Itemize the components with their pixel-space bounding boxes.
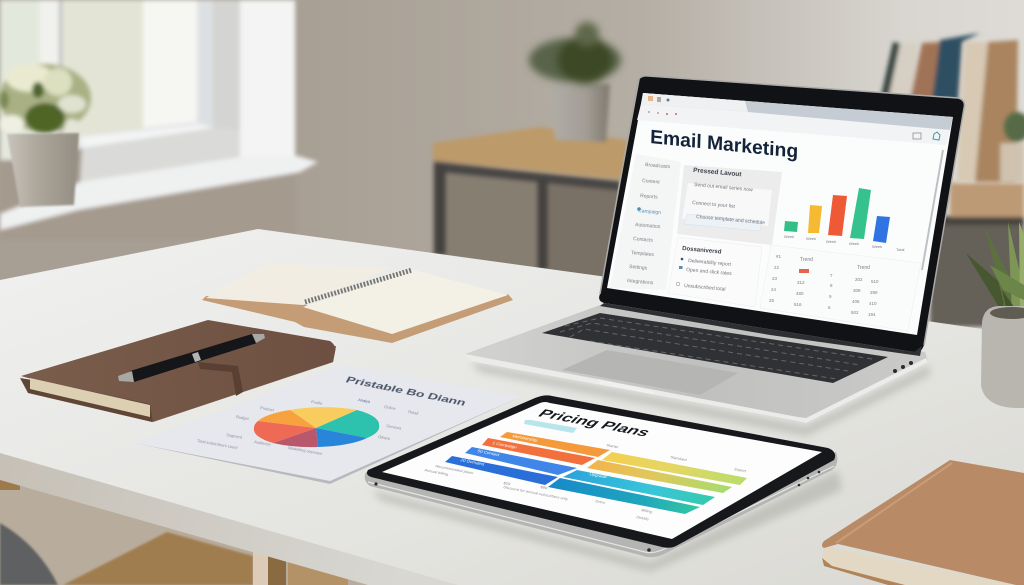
- paper captions: Profile: [311, 399, 324, 406]
- spiral notebook: [202, 263, 513, 343]
- home icon: [933, 132, 940, 140]
- screen: [607, 93, 953, 335]
- scrollbar: [921, 150, 944, 270]
- small shelf plant: [1000, 112, 1024, 183]
- left sidebar: Automation: [635, 222, 661, 230]
- pie chart: [254, 407, 379, 447]
- screen page: [607, 93, 953, 335]
- left sidebar: [610, 154, 681, 290]
- pricing rows right: [548, 452, 747, 514]
- left sidebar: Integrations: [627, 278, 654, 286]
- tablet small labels: Details: [636, 515, 650, 521]
- top cover and spine: [21, 320, 335, 422]
- screen title: Email Marketing: [650, 126, 799, 163]
- data table: 308: [853, 288, 861, 293]
- overview card: Open and click rates: [686, 267, 732, 277]
- left sidebar: Campaign: [638, 208, 661, 216]
- data table: 480: [796, 291, 804, 296]
- data table: Trend: [857, 265, 870, 271]
- concrete pot: [981, 306, 1024, 408]
- settings panel: Send out email series now: [694, 182, 753, 193]
- tablet small labels: [424, 443, 748, 521]
- paper captions: Budget: [236, 414, 250, 421]
- paper captions: Audience: [254, 439, 272, 447]
- paper captions: Others: [378, 434, 391, 441]
- overview card: Deliverability report: [688, 258, 732, 268]
- paper captions: Product: [260, 405, 275, 413]
- tablet edge highlight: [368, 466, 834, 553]
- potted plant at right: [966, 222, 1024, 408]
- books: [880, 33, 1018, 182]
- hinge: [600, 303, 922, 356]
- pricing title: Pricing Plans: [534, 408, 653, 439]
- paper title: Pristable Bo Diann: [344, 376, 467, 408]
- chart labels: Week: [826, 239, 836, 244]
- data table: 22: [774, 265, 780, 270]
- paper captions: Total subscribers count: [197, 438, 239, 450]
- tablet small labels: Starter: [606, 443, 620, 449]
- spiral binding: [305, 270, 412, 302]
- data table: 24: [771, 287, 777, 292]
- left sidebar: Templates: [631, 250, 655, 258]
- laptop shadow: [470, 362, 930, 436]
- leaves: [966, 222, 1024, 318]
- strap: [198, 362, 243, 396]
- pot rim opening: [990, 307, 1024, 319]
- data table: 510: [871, 279, 879, 284]
- row labels: [460, 434, 609, 479]
- tablet small labels: Standard: [670, 455, 687, 462]
- laptop: [465, 76, 964, 436]
- paper captions: Online: [384, 404, 397, 411]
- table front edge: [0, 452, 460, 585]
- row labels: Upgrade: [589, 472, 609, 479]
- settings panel: [677, 165, 782, 245]
- tablet shadow: [372, 470, 842, 572]
- pot: [7, 133, 79, 207]
- overview card: Unsubscribed total: [684, 283, 726, 293]
- row: orange: [500, 432, 610, 457]
- overview card: [668, 237, 762, 307]
- background books and shelf: [880, 33, 1024, 327]
- tablet small labels: Extra: [595, 499, 606, 505]
- right page: [303, 270, 508, 334]
- data table: 25: [769, 298, 775, 303]
- left page: [206, 263, 390, 305]
- spine highlight: [836, 463, 952, 543]
- tan cover edge: [202, 294, 513, 343]
- chair: [0, 523, 58, 585]
- data table: 9: [829, 294, 832, 299]
- data table: 516: [794, 302, 802, 307]
- chart labels: Week: [806, 236, 816, 241]
- tablet small labels: Recommended plans: [435, 464, 474, 475]
- chart labels: Week: [784, 234, 794, 239]
- paper captions: [197, 397, 419, 456]
- pages: [822, 546, 1016, 585]
- overview card: Dossaniversd: [682, 246, 722, 256]
- row: dark blue: [445, 456, 558, 485]
- brown leather notebook: [20, 320, 336, 422]
- paper captions: Segment: [226, 432, 243, 440]
- cover: [822, 460, 1024, 585]
- laptop base: [465, 304, 928, 421]
- floor: [63, 532, 253, 585]
- tablet screen: [382, 402, 822, 539]
- shelf: [930, 183, 1024, 327]
- background side table: [433, 127, 640, 290]
- settings panel: Pressed Lavout: [693, 167, 743, 178]
- pen: [118, 334, 265, 382]
- row: cyan-teal: [563, 470, 715, 505]
- tablet small labels: $99: [540, 485, 548, 490]
- area under table: [0, 450, 480, 585]
- data table: 202: [855, 277, 863, 282]
- row: yellow-green: [602, 452, 747, 485]
- trackpad notch: [598, 379, 655, 394]
- cabinet panels: [433, 160, 620, 290]
- email icon: [913, 133, 921, 139]
- frame: [436, 162, 620, 191]
- row labels: 20 Domains: [460, 458, 486, 466]
- chart labels: Total: [896, 247, 905, 252]
- background plant on table: [529, 22, 621, 142]
- left sidebar: Settings: [629, 264, 648, 272]
- tab dots: [648, 96, 677, 115]
- bar chart: [784, 188, 905, 252]
- trackpad: [562, 350, 738, 395]
- bar: green short: [784, 221, 798, 232]
- tablet small labels: Annual billing: [424, 468, 449, 476]
- paper captions: Retail: [408, 409, 419, 416]
- row: orange-green: [587, 460, 732, 493]
- bar: blue: [873, 216, 890, 243]
- data table: #1: [776, 254, 782, 259]
- bottom cover and pages: [20, 346, 336, 422]
- left sidebar: Broadcasts: [645, 162, 671, 170]
- tablet small labels: Billing: [641, 508, 653, 514]
- wood top: [433, 127, 640, 180]
- tablet small labels: Discount for annual subscribers only: [503, 485, 569, 501]
- data table: 502: [851, 310, 859, 315]
- plant on window sill: [0, 64, 91, 207]
- left sidebar: Contacts: [633, 236, 654, 244]
- row: teal-green: [548, 478, 700, 514]
- settings panel: Connect to your list: [692, 200, 736, 210]
- tablet silver body: [365, 452, 837, 557]
- browser tab strip: [640, 93, 953, 130]
- row: blue: [465, 447, 577, 475]
- keyboard: [542, 313, 888, 383]
- paper captions: Services: [386, 423, 402, 431]
- data table: 6: [828, 305, 831, 310]
- chart labels: Week: [849, 241, 859, 246]
- bar: yellow: [808, 205, 822, 233]
- data table: [760, 245, 921, 331]
- printed paper with pie chart: [134, 365, 520, 484]
- ports: [893, 361, 913, 373]
- data table: 23: [772, 276, 778, 281]
- cream pages: [30, 378, 150, 417]
- window with frame and sill: [0, 0, 318, 240]
- data table: 312: [797, 280, 805, 285]
- bar: red: [828, 195, 847, 236]
- data table: 7: [830, 273, 833, 278]
- left sidebar: Reports: [640, 193, 658, 201]
- left sidebar: Content: [642, 178, 660, 186]
- tablet: [365, 395, 842, 572]
- table top: [0, 229, 1024, 585]
- white table: [0, 229, 1024, 585]
- chart labels: Week: [872, 244, 882, 249]
- row labels: 50 Contact: [477, 449, 501, 457]
- bar: green tall: [850, 188, 871, 239]
- table leg: [253, 550, 268, 585]
- lid bezel: [599, 76, 964, 352]
- row: red-orange: [482, 438, 595, 465]
- foliage: [0, 64, 91, 133]
- browser toolbar: [637, 104, 950, 145]
- tablet small labels: $59: [503, 481, 511, 486]
- ports: [374, 471, 820, 552]
- row labels: 1 Campaign: [492, 441, 518, 450]
- data table: 290: [870, 290, 878, 295]
- paper captions: Analys: [358, 397, 371, 404]
- data table: 410: [869, 301, 877, 306]
- data table: 8: [830, 283, 833, 288]
- background wall: [0, 0, 1024, 330]
- data table: 406: [852, 299, 860, 304]
- data table: Trend: [800, 257, 813, 263]
- tablet small labels: Expert: [734, 467, 748, 473]
- settings panel: Choose template and schedule: [696, 214, 765, 226]
- bottom-right tan book: [822, 460, 1024, 585]
- data table: 194: [868, 312, 876, 317]
- row labels: Membership: [512, 434, 539, 443]
- front lip: [465, 354, 928, 423]
- chart labels: [784, 234, 905, 252]
- paper sheet: [134, 365, 520, 484]
- paper captions: Marketing overview: [288, 445, 323, 456]
- lid metal rim: [600, 76, 964, 345]
- highlight strip: [524, 420, 577, 433]
- tablet bezel: [367, 395, 835, 548]
- pricing rows left: [445, 432, 610, 485]
